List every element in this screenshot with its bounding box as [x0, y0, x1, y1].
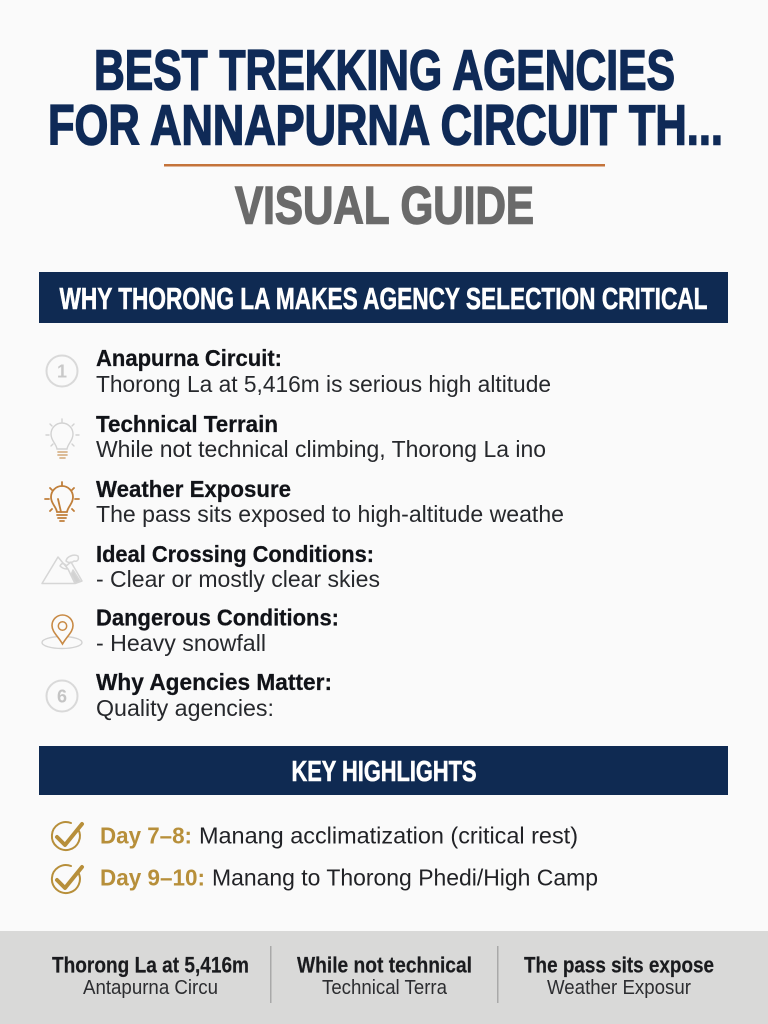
item 4 [42, 541, 380, 592]
icon: gold check [52, 865, 82, 893]
item 4: - Clear or mostly clear skies [96, 566, 380, 592]
item 1 [46, 345, 551, 397]
stat 1 [52, 952, 249, 999]
section banner: why Thorong La [39, 272, 728, 323]
icon: mountains [42, 555, 82, 584]
icon: number 6: 6 [57, 686, 67, 706]
icon: number 1 [46, 356, 78, 386]
footer stats band [0, 931, 768, 1024]
stat 1: Antapurna Circu [83, 977, 218, 999]
item 2 [46, 411, 546, 462]
list of reasons [42, 345, 564, 721]
stat 1: Thorong La at 5,416m [52, 952, 249, 978]
highlight: day 9-10 [52, 864, 598, 893]
icon: number 1: 1 [57, 362, 67, 382]
highlight: day 7-8: Day 7–8: [100, 822, 192, 848]
subtitle: VISUAL GUIDE [235, 176, 534, 236]
item 3 [45, 476, 564, 527]
item 6: Why Agencies Matter: [96, 669, 332, 695]
item 5: Dangerous Conditions: [96, 604, 339, 630]
highlight: day 9-10: Manang to Thorong Phedi/High Camp [212, 864, 598, 890]
highlight: day 7-8: Manang acclimatization (critical rest) [199, 822, 578, 848]
item 3: The pass sits exposed to high-altitude weathe [96, 501, 564, 527]
section banner: key highlights [39, 746, 728, 795]
title [48, 38, 723, 158]
item 3: Weather Exposure [96, 476, 291, 502]
icon: light bulb grey [46, 419, 79, 458]
item 6 [46, 669, 332, 721]
icon: light bulb orange [45, 482, 79, 521]
item 2: While not technical climbing, Thorong La ino [96, 436, 546, 462]
item 1: Thorong La at 5,416m is serious high altitude [96, 371, 551, 397]
item 1: Anapurna Circuit: [96, 345, 282, 371]
stat 2: While not technical [297, 952, 472, 978]
stat 3: Weather Exposur [547, 977, 691, 999]
item 6: Quality agencies: [96, 695, 274, 721]
icon: gold check [52, 822, 82, 850]
highlight: day 7-8 [52, 822, 578, 850]
item 5: - Heavy snowfall [96, 630, 266, 656]
stat 3 [524, 952, 714, 999]
icon: map pin [42, 615, 82, 648]
item 4: Ideal Crossing Conditions: [96, 541, 374, 567]
stat 3: The pass sits expose [524, 952, 714, 978]
section banner: key highlights: KEY HIGHLIGHTS [292, 756, 476, 788]
stat 2: Technical Terra [322, 977, 448, 999]
item 5 [42, 604, 339, 656]
item 2: Technical Terrain [96, 411, 278, 437]
stat 2 [297, 952, 472, 999]
icon: number 6 [46, 680, 78, 712]
highlight: day 9-10: Day 9–10: [100, 864, 205, 890]
